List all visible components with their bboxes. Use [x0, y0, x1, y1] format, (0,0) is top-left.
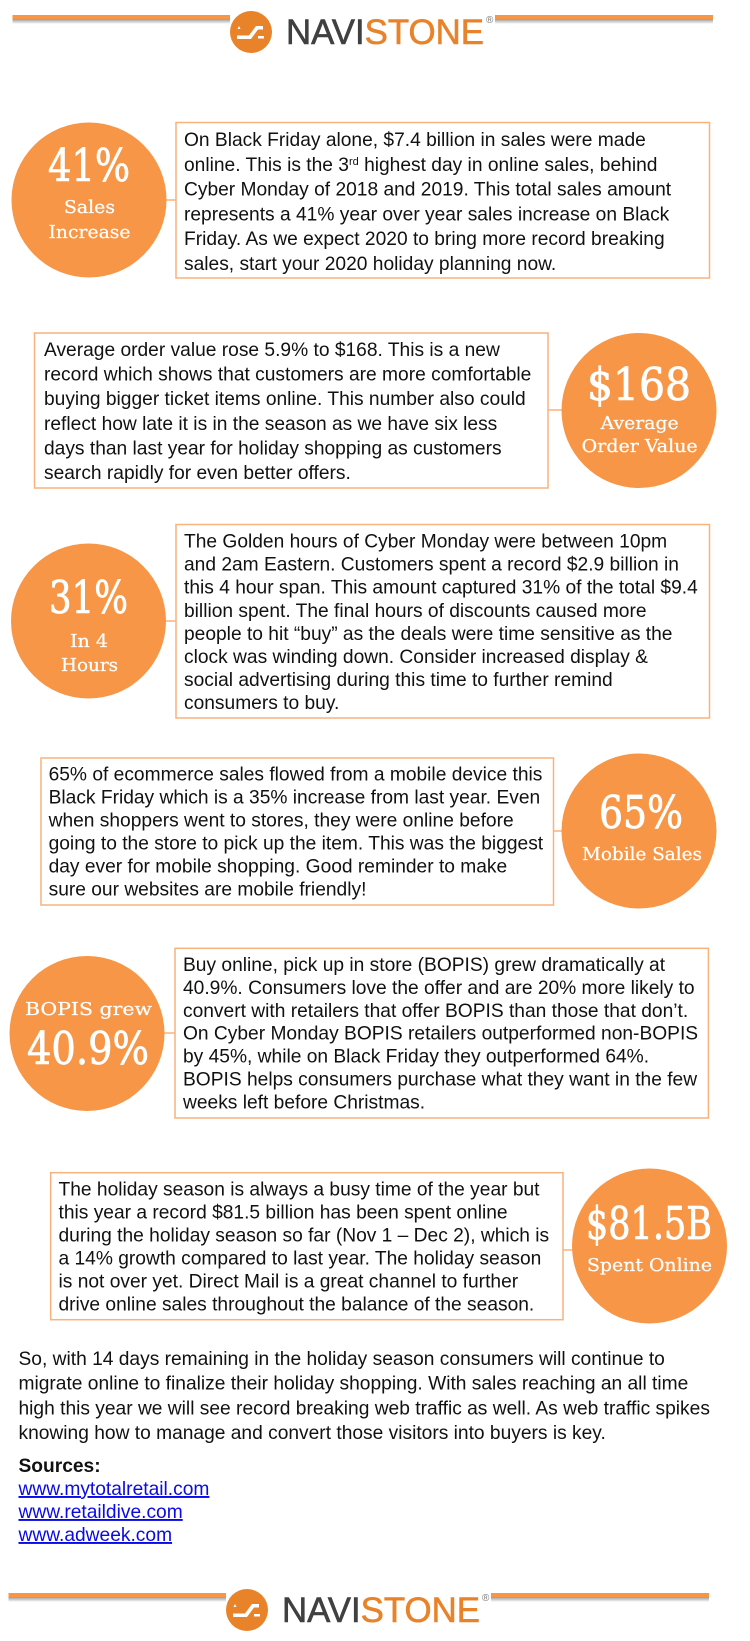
text box: 65% of ecommerce sales flowed from a mobile device this	[49, 765, 542, 786]
text box: The Golden hours of Cyber Monday were between 10pm	[184, 532, 667, 552]
text box: people to hit “buy” as the deals were time sensitive as the	[184, 624, 672, 645]
stat circle	[10, 956, 164, 1111]
text box: rd	[349, 156, 359, 168]
text box: online. This is the 3	[184, 155, 349, 176]
sources list: Sources:	[18, 1456, 101, 1477]
text box: On Black Friday alone, $7.4 billion in sales were made	[184, 130, 646, 151]
closing paragraph: So, with 14 days remaining in the holiday season consumers will continue to	[18, 1349, 665, 1370]
header logo	[12, 11, 713, 53]
text box	[176, 122, 710, 278]
stat circle	[572, 1168, 727, 1324]
stat circle: Hours	[61, 655, 118, 676]
text box: sure our websites are mobile friendly!	[49, 880, 366, 901]
connector	[160, 199, 177, 201]
connector	[562, 1249, 585, 1251]
text box	[34, 333, 548, 488]
text box: Black Friday which is a 35% increase from last year. Even	[49, 788, 540, 809]
text box: On Cyber Monday BOPIS retailers outperformed non-BOPIS	[183, 1024, 698, 1045]
text box: a 14% growth compared to last year. The holiday season	[58, 1249, 541, 1270]
stat circle: Increase	[48, 222, 130, 243]
connector	[160, 620, 177, 622]
sources list: www.mytotalretail.com	[18, 1479, 209, 1500]
text box: this year a record $81.5 billion has been spent online	[58, 1203, 508, 1224]
logo wordmark: NAVISTONE	[282, 1591, 480, 1630]
panel: mobile sales	[41, 754, 716, 908]
connector	[553, 830, 570, 832]
text box: BOPIS helps consumers purchase what they want in the few	[183, 1070, 697, 1090]
text box: consumers to buy.	[184, 693, 339, 714]
text box: record which shows that customers are more comfortable	[44, 365, 531, 386]
text box: Friday. As we expect 2020 to bring more record breaking	[184, 229, 665, 250]
panel: sales increase	[12, 122, 710, 278]
panel: 31% in 4 hours	[11, 524, 710, 718]
logo wordmark: NAVISTONE	[286, 13, 484, 52]
text box: clock was winding down. Consider increased display &	[184, 647, 648, 668]
text box: days than last year for holiday shopping as customers	[44, 438, 502, 459]
text box: is not over yet. Direct Mail is a great channel to further	[58, 1272, 519, 1293]
stat circle: 65%	[599, 786, 683, 839]
text box: by 45%, while on Black Friday they outperformed 64%.	[183, 1047, 649, 1068]
footer logo	[8, 1589, 709, 1631]
text box: convert with retailers that offer BOPIS than those that don’t.	[183, 1001, 688, 1022]
text box: billion spent. The final hours of discounts caused more	[184, 601, 647, 622]
text box: going to the store to pick up the item. This was the biggest	[49, 834, 544, 855]
text box: this 4 hour span. This amount captured 31% of the total $9.4	[184, 578, 698, 599]
text box: search rapidly for even better offers.	[44, 463, 351, 484]
text box: sales, start your 2020 holiday planning now.	[184, 254, 556, 275]
text box: Average order value rose 5.9% to $168. This is a new	[44, 340, 500, 361]
text box	[175, 948, 708, 1118]
text box	[176, 524, 710, 718]
text box: Buy online, pick up in store (BOPIS) grew dramatically at	[183, 955, 666, 976]
connector	[548, 409, 570, 411]
closing paragraph	[18, 1349, 710, 1444]
icon: logo escalator	[226, 1589, 268, 1631]
text box: represents a 41% year over year sales increase on Black	[184, 204, 670, 225]
stat circle: Average	[600, 413, 679, 434]
text box: social advertising during this time to further remind	[184, 670, 613, 691]
text box: and 2am Eastern. Customers spent a record $2.9 billion in	[184, 555, 679, 576]
stat circle: In 4	[70, 631, 108, 652]
text box: Cyber Monday of 2018 and 2019. This total sales amount	[184, 180, 672, 200]
stat circle	[562, 333, 716, 488]
text box: drive online sales throughout the balance of the season.	[58, 1295, 534, 1316]
text box: reflect how late it is in the season as we have six less	[44, 414, 497, 435]
text box	[51, 1173, 563, 1320]
stat circle	[11, 544, 166, 698]
stat circle: Sales	[64, 197, 115, 218]
connector	[160, 1032, 175, 1034]
text box	[41, 758, 554, 905]
closing paragraph: high this year we will see record breaking web traffic as well. As web traffic spikes	[18, 1398, 710, 1419]
panel: spent online	[51, 1168, 727, 1324]
sources list	[18, 1456, 209, 1546]
text box: during the holiday season so far (Nov 1 – Dec 2), which is	[58, 1226, 549, 1247]
text box: weeks left before Christmas.	[182, 1092, 425, 1113]
stat circle: Order Value	[582, 436, 698, 457]
stat circle: BOPIS grew	[25, 999, 153, 1020]
text box: highest day in online sales, behind	[359, 155, 657, 176]
stat circle: Spent Online	[587, 1255, 712, 1276]
stat circle: Mobile Sales	[582, 844, 702, 865]
stat circle: 31%	[49, 571, 128, 624]
icon: logo escalator	[230, 11, 272, 53]
sources list: www.adweek.com	[18, 1525, 172, 1546]
registered mark: ®	[486, 15, 494, 26]
sources list: www.retaildive.com	[18, 1502, 183, 1523]
stat circle: 41%	[48, 139, 130, 192]
text box: 40.9%. Consumers love the offer and are 20% more likely to	[183, 978, 695, 999]
stat circle	[12, 122, 166, 278]
text box: when shoppers went to stores, they were online before	[48, 811, 514, 832]
registered mark: ®	[482, 1593, 490, 1604]
text box: The holiday season is always a busy time of the year but	[58, 1180, 540, 1201]
panel: BOPIS	[10, 948, 708, 1118]
stat circle: 40.9%	[27, 1022, 149, 1075]
stat circle: $81.5B	[586, 1197, 712, 1250]
text box: buying bigger ticket items online. This number also could	[44, 389, 526, 410]
stat circle	[562, 754, 716, 908]
closing paragraph: migrate online to finalize their holiday shopping. With sales reaching an all time	[18, 1374, 688, 1395]
text box: day ever for mobile shopping. Good reminder to make	[49, 857, 507, 878]
stat circle: $168	[587, 358, 691, 411]
closing paragraph: knowing how to manage and convert those visitors into buyers is key.	[18, 1423, 606, 1444]
panel: average order value	[34, 333, 716, 488]
